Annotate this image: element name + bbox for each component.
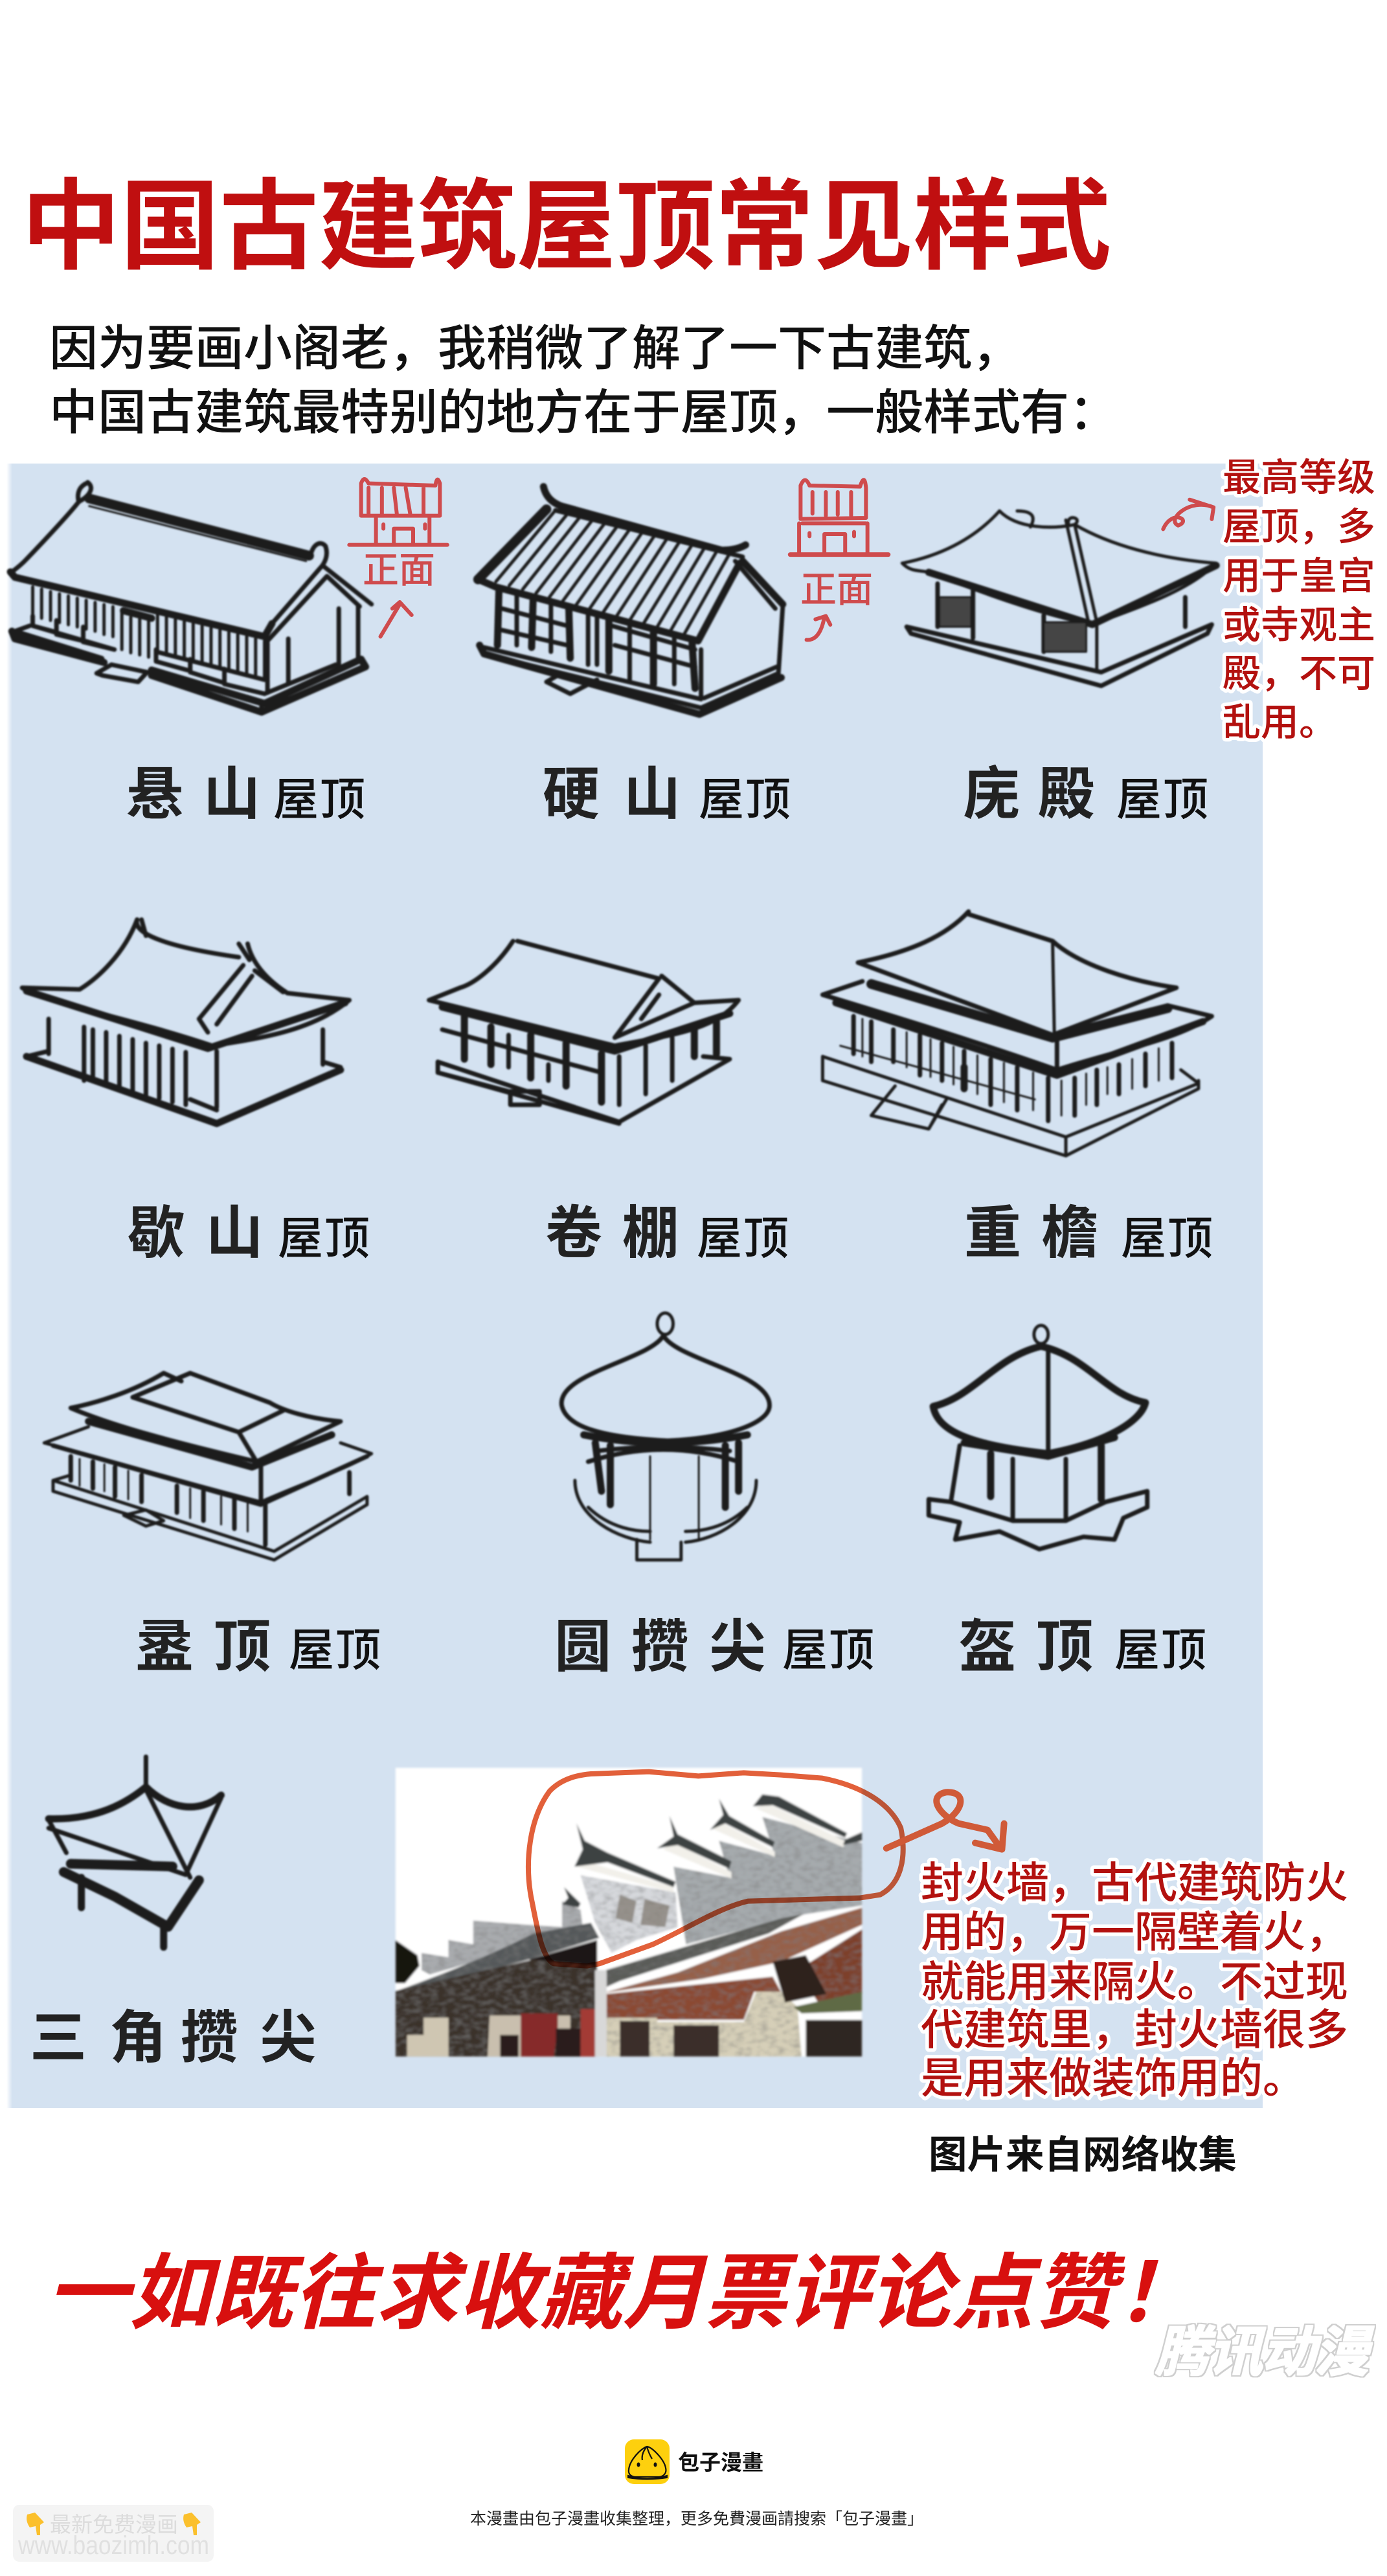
panel: roof styles background [6, 464, 1263, 2108]
callout: 最高等级屋顶: 或寺观主 [1223, 604, 1375, 647]
icon: 庑殿 building [902, 511, 1216, 686]
label: 盔顶屋顶: 屋顶 [1114, 1625, 1206, 1675]
callout: 封火墙: 就能用来隔火。不过现 [921, 1958, 1348, 2006]
label: 盝顶屋顶: 屋顶 [289, 1625, 381, 1675]
label: 硬山 正面: 正面 [800, 569, 873, 610]
image credit: 图片来自网络收集 [929, 2133, 1237, 2177]
label: 庑殿屋顶: 庑殿 [963, 762, 1095, 826]
icon: 悬山 front sketch [349, 479, 447, 636]
label: 圆攒尖屋顶: 屋顶 [782, 1625, 874, 1675]
icon: 悬山 building [10, 482, 372, 712]
intro text [49, 321, 1118, 440]
label: 硬山屋顶 [543, 762, 791, 826]
icon: 歇山 building [22, 919, 350, 1123]
photo: 封火墙 [396, 1768, 862, 2057]
callout: 最高等级屋顶: 屋顶，多 [1223, 506, 1375, 548]
callout: 最高等级屋顶: 乱用。 [1223, 701, 1337, 744]
icon: 三角攒尖 pavilion [49, 1757, 221, 1947]
label: 悬山屋顶 [126, 762, 365, 826]
callout: 封火墙: 是用来做装饰用的。 [921, 2054, 1305, 2102]
label: 三角攒尖: 三角攒尖 [30, 2006, 317, 2070]
icon: 重檐 building [822, 912, 1212, 1156]
footer note: 本漫畫由包子漫畫收集整理，更多免費漫画請搜索「包子漫畫」 [470, 2510, 923, 2528]
badge: baozimh watermark: 最新免费漫画 [50, 2513, 178, 2537]
callout: 最高等级屋顶 [1223, 456, 1375, 744]
label: 悬山 正面: 正面 [363, 550, 435, 590]
label: 卷棚屋顶 [545, 1201, 789, 1265]
label: 卷棚屋顶: 卷棚 [545, 1201, 679, 1265]
intro text: 因为要画小阁老，我稍微了解了一下古建筑， [49, 321, 1021, 375]
intro text: 中国古建筑最特别的地方在于屋顶，一般样式有： [49, 385, 1118, 440]
logo text: 包子漫畫 [678, 2450, 763, 2474]
watermark: 腾讯动漫: 腾讯动漫 [1155, 2322, 1375, 2382]
label: 盝顶屋顶 [136, 1615, 381, 1679]
label: 盔顶屋顶 [959, 1615, 1206, 1679]
title: 中国古建筑屋顶常见样式 [21, 172, 1111, 282]
label: 庑殿屋顶: 屋顶 [1116, 774, 1208, 825]
callout: 最高等级屋顶: 殿，不可 [1223, 653, 1375, 695]
label: 悬山屋顶: 屋顶 [273, 774, 365, 825]
label: 硬山屋顶: 硬山 [543, 762, 681, 826]
label: 圆攒尖屋顶 [554, 1615, 874, 1679]
label: 盝顶屋顶: 盝顶 [136, 1615, 271, 1679]
slogan: 一如既往求收藏月票评论点赞！ [47, 2247, 1198, 2339]
icon: bun logo [625, 2439, 670, 2484]
badge: baozimh watermark [13, 2505, 214, 2562]
label: 歇山屋顶: 屋顶 [278, 1213, 370, 1264]
label: 歇山屋顶: 歇山 [128, 1201, 263, 1265]
icon: 盝顶 building [44, 1373, 372, 1560]
callout: 封火墙 [921, 1859, 1348, 2102]
icon: 盔顶 pavilion [929, 1325, 1147, 1549]
icon: 硬山 building [478, 487, 783, 714]
callout: 最高等级屋顶: 用于皇宫 [1223, 555, 1375, 598]
label: 重檐屋顶 [964, 1201, 1213, 1265]
callout: 封火墙: 用的，万一隔壁着火， [921, 1908, 1348, 1956]
annotation: red circle around 封火墙 [528, 1772, 903, 1966]
icon: 卷棚 building [429, 941, 739, 1123]
badge: baozimh watermark: www.baozimh.com [17, 2531, 209, 2560]
callout: 最高等级屋顶: 最高等级 [1223, 456, 1375, 499]
label: 重檐屋顶: 屋顶 [1121, 1213, 1213, 1264]
icon: 圆攒尖 pavilion [561, 1313, 769, 1560]
label: 卷棚屋顶: 屋顶 [697, 1213, 789, 1264]
label: 圆攒尖屋顶: 圆攒尖 [554, 1615, 766, 1679]
callout: 封火墙: 封火墙，古代建筑防火 [921, 1859, 1348, 1907]
label: 盔顶屋顶: 盔顶 [959, 1615, 1093, 1679]
label: 硬山屋顶: 屋顶 [699, 774, 791, 825]
label: 庑殿屋顶 [963, 762, 1208, 826]
callout arrow: 最高等级 [1163, 500, 1213, 529]
label: 重檐屋顶: 重檐 [964, 1201, 1098, 1265]
arrow: 封火墙 pointer [886, 1792, 1004, 1850]
label: 歇山屋顶 [128, 1201, 370, 1265]
icon: 硬山 front sketch [790, 480, 888, 640]
label: 悬山屋顶: 悬山 [126, 762, 260, 826]
callout: 封火墙: 代建筑里，封火墙很多 [921, 2006, 1348, 2054]
